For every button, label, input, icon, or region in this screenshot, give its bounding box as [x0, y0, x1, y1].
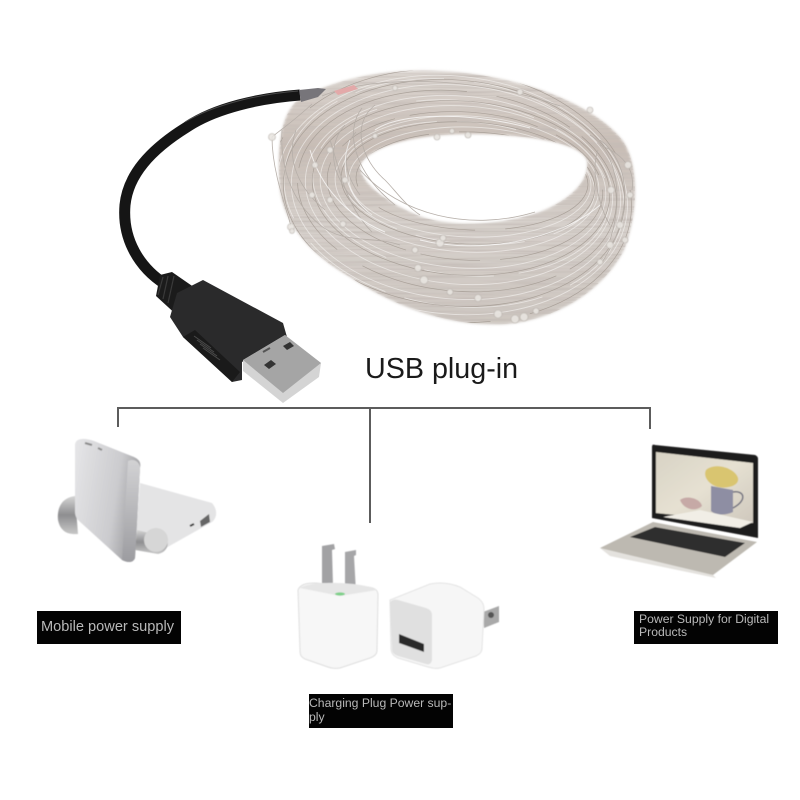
label: Power Supply for Digital Products: Power Supply for Digital Products: [639, 612, 769, 639]
label: Mobile power supply: Mobile power supply: [41, 619, 174, 635]
connector lines: [118, 408, 650, 523]
icon: laptop: [600, 445, 758, 578]
label: Charging Plug Power supply: ply: [309, 710, 325, 724]
icon: white charger front: [298, 544, 378, 668]
USB cable: [125, 85, 358, 284]
stray wires around the coil: [272, 81, 633, 265]
label: Charging Plug Power supply: [309, 694, 453, 728]
label: Charging Plug Power supply: Charging Plug Power sup-: [309, 696, 451, 710]
screen photo: flowers and mug: [663, 466, 753, 528]
heading: USB plug-in: USB plug-in: [365, 353, 518, 385]
heat shrink sleeve: [299, 88, 326, 102]
USB plug: [156, 272, 321, 403]
red marker on wire: [334, 85, 358, 95]
wire coil of fairy lights: [268, 70, 636, 326]
icon: white charger side: [390, 583, 499, 668]
metal connector: [243, 335, 321, 403]
icon: power banks: [58, 439, 216, 562]
LED beads: [268, 86, 633, 323]
